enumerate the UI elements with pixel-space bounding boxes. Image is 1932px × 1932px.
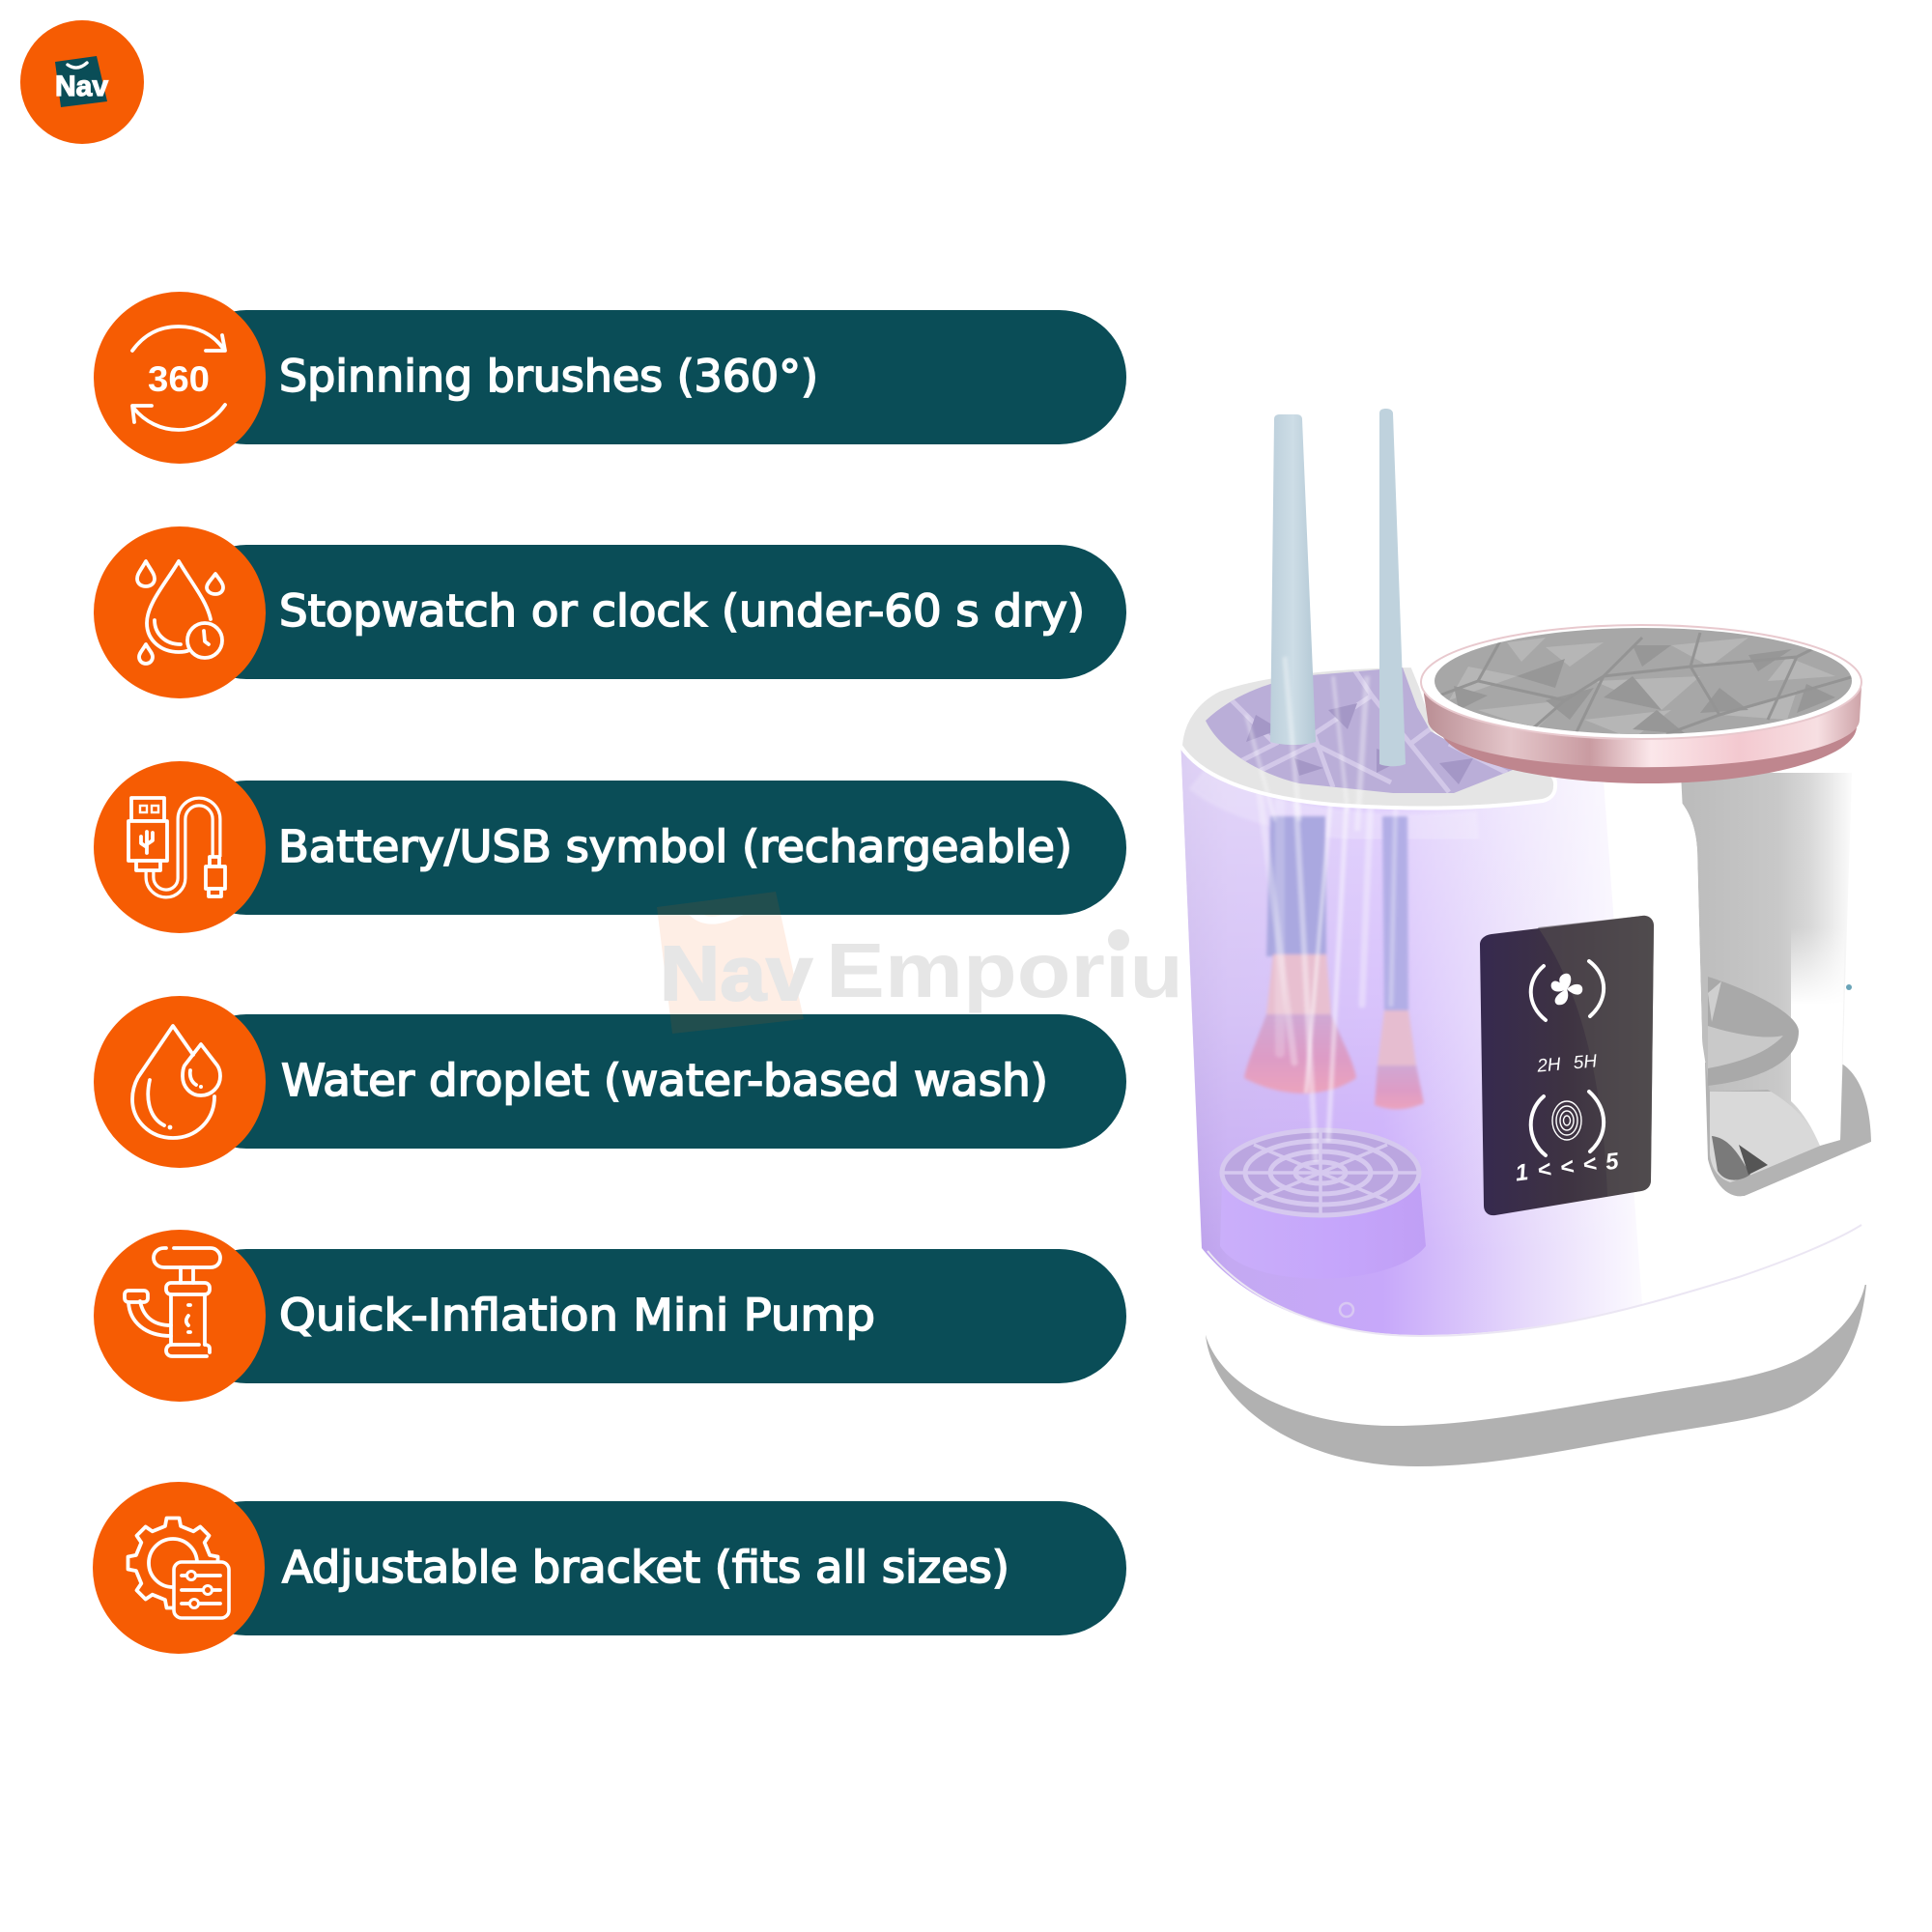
pill: water-based wash label: Water droplet (water-based wash) bbox=[281, 1055, 1048, 1106]
holder: cylinder bbox=[1220, 1183, 1426, 1279]
row 1: spinning brushes bbox=[94, 292, 1126, 464]
brush: large bristles bbox=[1244, 1014, 1356, 1094]
icon: fingerprint in brackets bbox=[1531, 1092, 1604, 1155]
row 6: adjustable bracket bbox=[93, 1482, 1126, 1654]
pill: battery and usb label bbox=[180, 781, 1126, 915]
brush: large handle top bbox=[1270, 414, 1316, 745]
brush: small handle through glass bbox=[1382, 816, 1408, 1012]
logo badge: Nav bbox=[55, 71, 108, 102]
icon: fan in brackets bbox=[1531, 961, 1604, 1020]
pill: stopwatch label bbox=[180, 545, 1126, 679]
body: white right block bbox=[1604, 781, 1871, 1304]
icon: hand pump bbox=[94, 1230, 266, 1402]
base: white band bbox=[1202, 1130, 1871, 1426]
icon: water droplets bbox=[94, 996, 266, 1168]
body: pale upper glow bbox=[1180, 734, 1871, 1335]
right: opening interior bbox=[1710, 1092, 1840, 1182]
holder: grid top bbox=[1222, 1130, 1419, 1215]
small drain ring bbox=[1340, 1303, 1353, 1317]
right: inner gray disc bbox=[1708, 977, 1852, 1086]
top rim: crescent collar bbox=[1180, 666, 1555, 809]
icon: drop with clock bbox=[94, 526, 266, 698]
disc: glossy pink band bbox=[1423, 688, 1861, 767]
pill: water-based wash label bbox=[180, 1014, 1126, 1149]
text: speed level: 1 < < < 5 bbox=[1514, 1148, 1621, 1186]
right: opening gray rim bbox=[1705, 1063, 1871, 1196]
watermark: Nav Emporium: Emporiu bbox=[826, 927, 1183, 1013]
pill: adjustable bracket label bbox=[179, 1501, 1126, 1635]
brush: small bristles bbox=[1375, 1065, 1424, 1109]
logo badge bbox=[20, 20, 144, 144]
row 3: usb rechargeable bbox=[94, 761, 1126, 933]
disc: top rim bbox=[1421, 625, 1861, 739]
brush: small ferrule bbox=[1378, 1010, 1416, 1065]
body: main housing with purple fade bbox=[1180, 734, 1871, 1335]
disc: gray silicone mat bbox=[1435, 628, 1855, 739]
pill: spinning brushes label: Spinning brushes (360°) bbox=[279, 351, 818, 402]
row 4: water droplet bbox=[94, 996, 1126, 1168]
brush: large ferrule bbox=[1266, 954, 1331, 1014]
control panel bbox=[1480, 916, 1654, 1215]
pill: mini pump label: Quick-Inflation Mini Pump bbox=[279, 1290, 875, 1341]
body: seam line bbox=[1208, 1225, 1861, 1336]
row 5: mini pump bbox=[94, 1230, 1126, 1402]
rays: over collar bbox=[1246, 657, 1367, 831]
icon: 360 rotation bbox=[94, 292, 266, 464]
icon: usb cable bbox=[94, 761, 266, 933]
rays: water streams bbox=[1256, 763, 1396, 1159]
pill: stopwatch label: Stopwatch or clock (under-60 s dry) bbox=[279, 585, 1085, 637]
text: timer options: 2H 5H bbox=[1535, 1051, 1598, 1077]
watermark: Nav Emporium bbox=[657, 892, 1183, 1034]
brushes seen through glass bbox=[1244, 816, 1424, 1109]
top rim: purple crescent mat bbox=[1206, 668, 1513, 793]
disc: lower dark pink band bbox=[1439, 705, 1857, 783]
pill: spinning brushes label bbox=[180, 310, 1126, 444]
product: brush cleaner device bbox=[1180, 409, 1871, 1466]
right: white lower band of column bbox=[1791, 927, 1845, 1146]
icon: gear with sliders bbox=[93, 1482, 265, 1654]
brush: small handle top bbox=[1379, 409, 1406, 766]
right: silver glass column bbox=[1681, 773, 1852, 1146]
watermark: Nav Emporium: Nav bbox=[660, 930, 813, 1016]
pill: adjustable bracket label: Adjustable bracket (fits all sizes) bbox=[282, 1542, 1009, 1593]
pill: battery and usb label: Battery/USB symbol (rechargeable) bbox=[278, 821, 1072, 872]
pill: mini pump label bbox=[180, 1249, 1126, 1383]
icon: 360 rotation: 360 bbox=[148, 359, 210, 399]
brush: large handle through glass bbox=[1266, 816, 1326, 956]
base: gray foot bbox=[1206, 1285, 1866, 1466]
row 2: quick dry bbox=[94, 526, 1126, 698]
collar shadow band bbox=[1198, 778, 1478, 829]
